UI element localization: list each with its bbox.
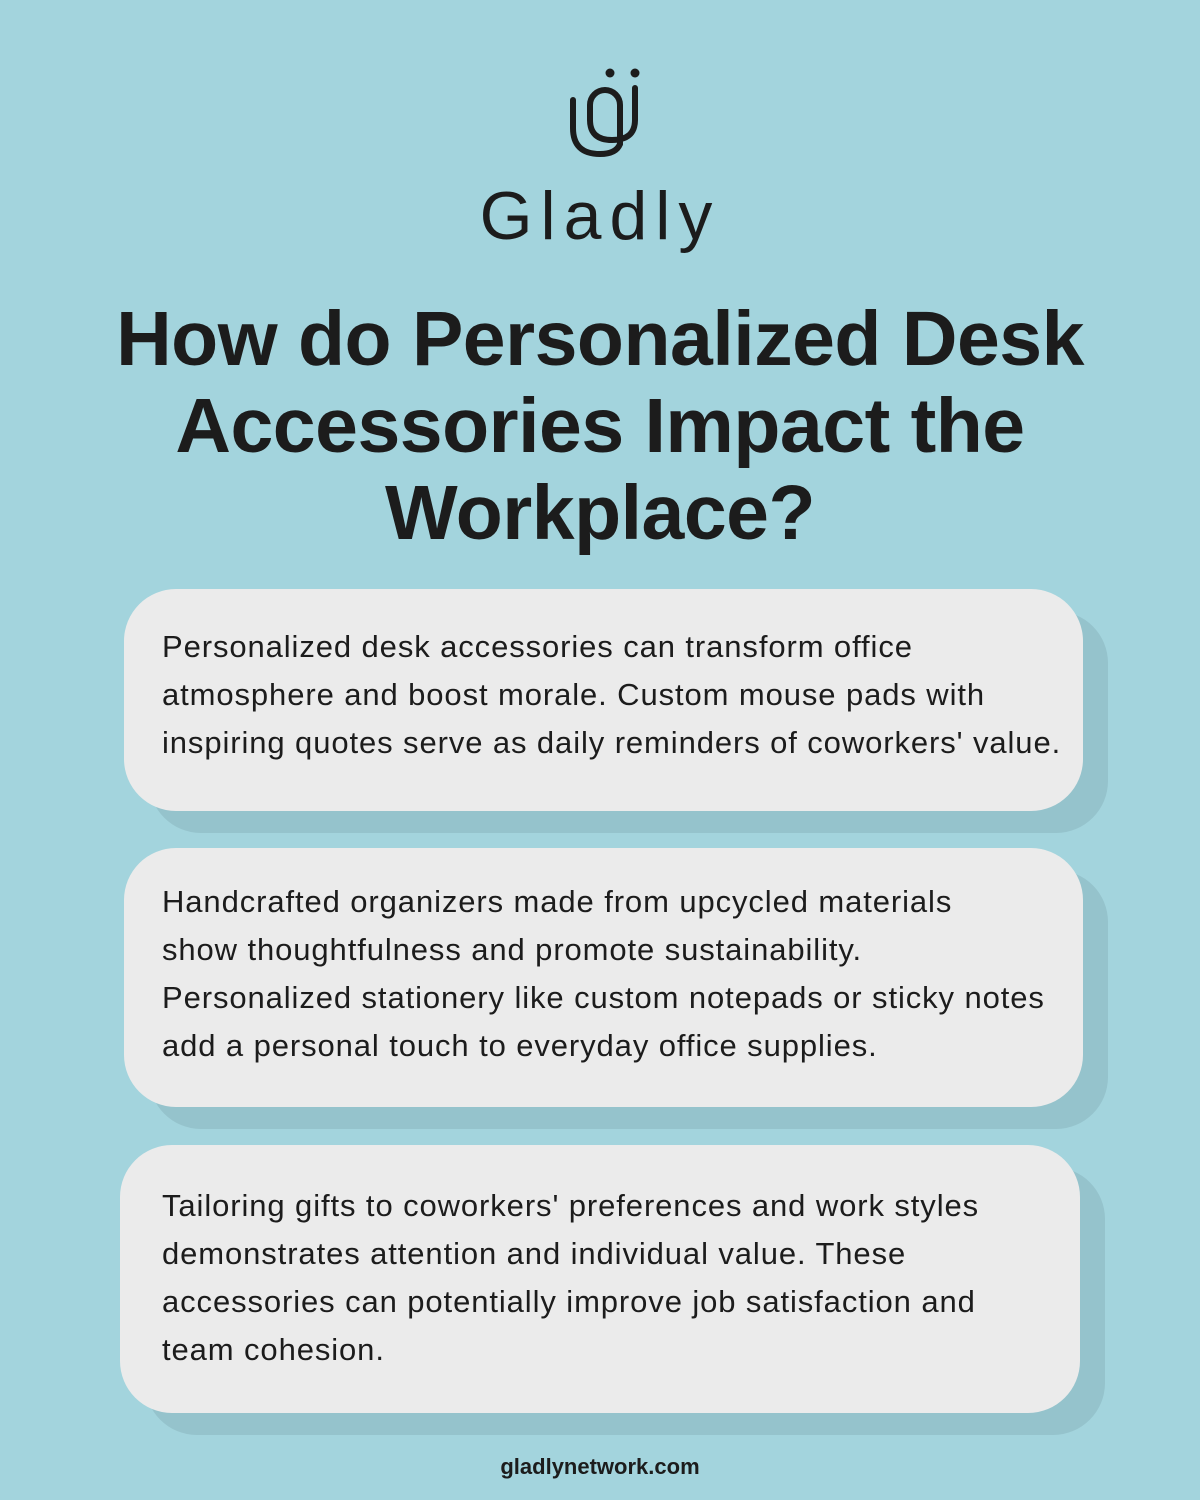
card 1: atmosphere and boost morale. Custom mouse pads with xyxy=(162,677,985,712)
card 3: accessories can potentially improve job satisfaction and xyxy=(162,1284,976,1319)
card 2: add a personal touch to everyday office supplies. xyxy=(162,1028,878,1063)
title xyxy=(116,296,1084,556)
title: Workplace? xyxy=(385,470,815,556)
footer url: gladlynetwork.com xyxy=(500,1454,700,1479)
card 2: Personalized stationery like custom notepads or sticky notes xyxy=(162,980,1045,1015)
card 2 xyxy=(124,848,1083,1107)
card 1: Personalized desk accessories can transform office xyxy=(162,629,913,664)
card 2: Handcrafted organizers made from upcycled materials xyxy=(162,884,952,919)
title: Accessories Impact the xyxy=(175,383,1025,469)
card 3: Tailoring gifts to coworkers' preferences and work styles xyxy=(162,1188,979,1223)
card 3: demonstrates attention and individual value. These xyxy=(162,1236,906,1271)
title: How do Personalized Desk xyxy=(116,296,1084,382)
logo wordmark: Gladly xyxy=(480,178,720,254)
card 1 xyxy=(124,589,1083,811)
logo icon xyxy=(570,68,640,157)
card 2: show thoughtfulness and promote sustainability. xyxy=(162,932,862,967)
card 3: team cohesion. xyxy=(162,1332,385,1367)
card 1: inspiring quotes serve as daily reminders of coworkers' value. xyxy=(162,725,1061,760)
card 3 xyxy=(120,1145,1080,1413)
